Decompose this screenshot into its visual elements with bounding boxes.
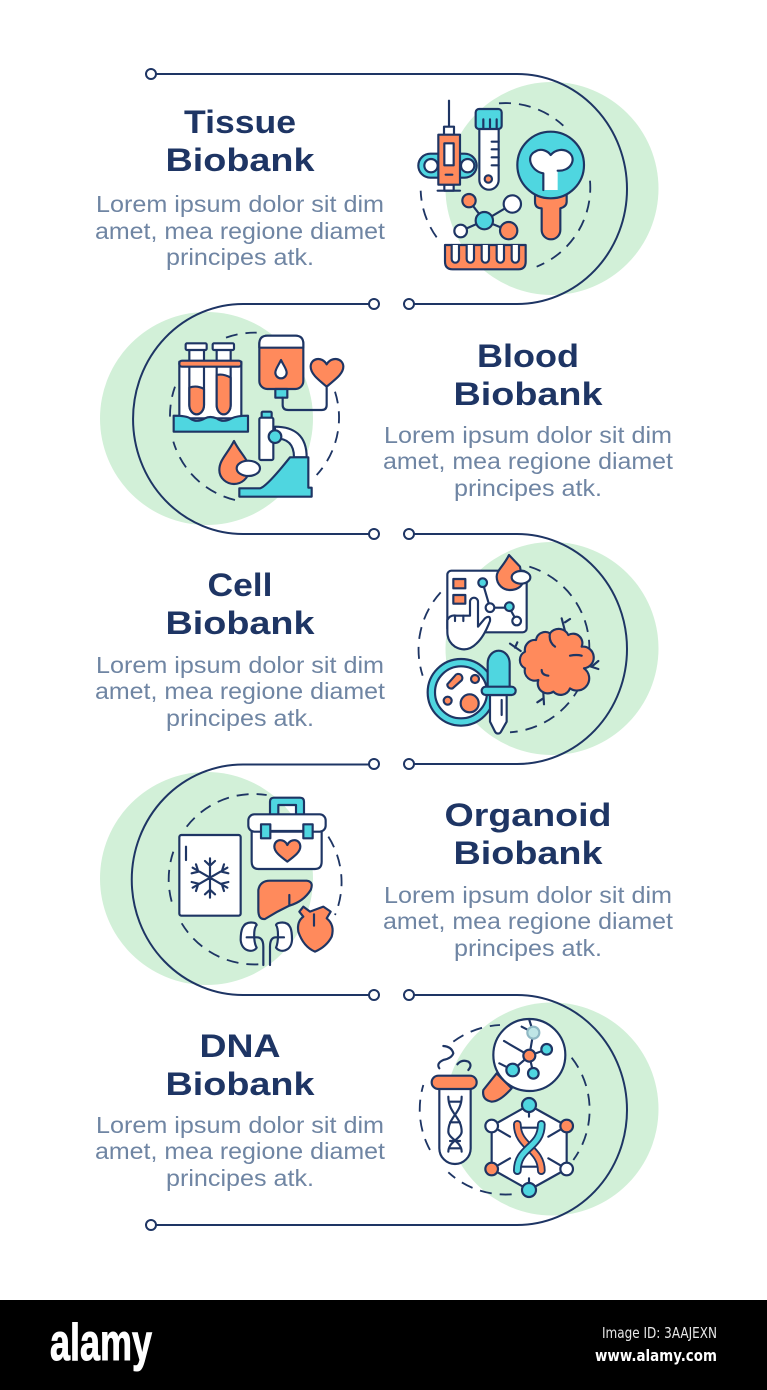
text block: principes atk. — [166, 244, 314, 270]
heading — [166, 1028, 315, 1102]
green circle — [446, 542, 658, 755]
heading: DNA — [200, 1028, 280, 1064]
icon: blood samples and microscope — [170, 333, 343, 500]
text block: Lorem ipsum dolor sit dim — [96, 652, 384, 678]
panel: Tissue Biobank — [95, 69, 658, 309]
text block: Lorem ipsum dolor sit dim — [384, 882, 672, 908]
start dot — [369, 759, 379, 769]
text block: Lorem ipsum dolor sit dim — [96, 191, 384, 217]
heading: Tissue — [184, 104, 296, 140]
connector line — [132, 764, 369, 995]
website: www.alamy.com — [595, 1346, 717, 1365]
text block: amet, mea regione diamet — [383, 448, 673, 474]
text block: principes atk. — [454, 935, 602, 961]
heading: Blood — [477, 338, 579, 374]
text block — [383, 422, 673, 501]
connector line — [156, 995, 627, 1225]
start dot — [404, 529, 414, 539]
panel: DNA Biobank — [95, 990, 658, 1230]
footer bar — [0, 1300, 767, 1390]
heading — [444, 797, 612, 871]
text block: amet, mea regione diamet — [383, 908, 673, 934]
start dot — [404, 990, 414, 1000]
heading: Cell — [208, 567, 272, 603]
connector line — [133, 304, 369, 534]
green circle — [446, 1002, 658, 1216]
end dot — [369, 529, 379, 539]
panel: Blood Biobank — [100, 299, 673, 539]
end dot — [146, 1220, 156, 1230]
heading — [166, 567, 315, 641]
image id: Image ID: 3AAJEXN — [602, 1324, 717, 1342]
text block — [95, 652, 385, 731]
text block — [95, 1112, 385, 1191]
connector line — [156, 74, 627, 304]
end dot — [404, 759, 414, 769]
icon: cell analysis — [419, 555, 598, 734]
text block — [383, 882, 673, 961]
text block — [95, 191, 385, 270]
text block: principes atk. — [166, 1165, 314, 1191]
text block: amet, mea regione diamet — [95, 1138, 385, 1164]
end dot — [404, 299, 414, 309]
end dot — [369, 990, 379, 1000]
green circle — [446, 82, 658, 295]
icon: DNA research — [420, 1019, 590, 1197]
text block: principes atk. — [454, 475, 602, 501]
green circle — [100, 772, 313, 985]
heading: Organoid — [444, 797, 612, 833]
heading: Biobank — [166, 1066, 315, 1102]
logo text: alamy — [50, 1314, 152, 1372]
start dot — [369, 299, 379, 309]
text block: amet, mea regione diamet — [95, 678, 385, 704]
heading: Biobank — [454, 835, 603, 871]
text block: Lorem ipsum dolor sit dim — [96, 1112, 384, 1138]
panel: Organoid Biobank — [100, 759, 673, 1000]
text block: amet, mea regione diamet — [95, 218, 385, 244]
icon: tissue sampling tools — [418, 101, 590, 269]
heading: Biobank — [166, 605, 315, 641]
start dot — [146, 69, 156, 79]
heading — [454, 338, 603, 412]
text block: Lorem ipsum dolor sit dim — [384, 422, 672, 448]
panel: Cell Biobank — [95, 529, 658, 769]
connector line — [414, 534, 627, 764]
text block: principes atk. — [166, 705, 314, 731]
heading — [166, 104, 315, 178]
heading: Biobank — [166, 142, 315, 178]
icon: organ storage — [169, 794, 342, 965]
heading: Biobank — [454, 376, 603, 412]
green circle — [100, 312, 313, 525]
